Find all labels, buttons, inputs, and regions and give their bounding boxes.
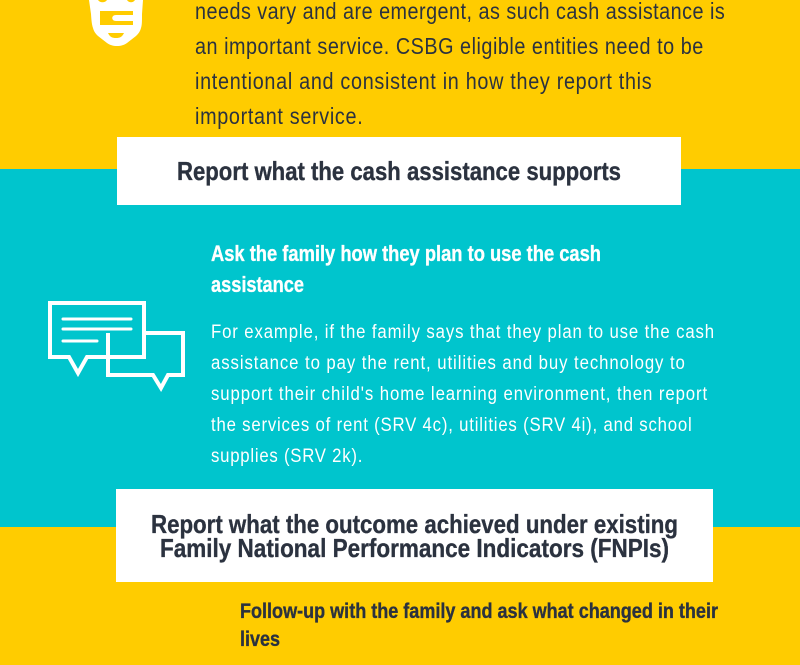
panel: yellow top background bbox=[0, 0, 800, 169]
body text: rent and utilities example: supplies (SRV 2k). bbox=[211, 445, 362, 466]
text block: intro paragraph: an important service. CSBG eligible entities need to be bbox=[195, 34, 703, 59]
heading: report what the cash assistance supports bbox=[117, 137, 681, 205]
subheading: ask the family: assistance bbox=[211, 272, 304, 297]
subheading: follow-up with the family bbox=[240, 600, 718, 651]
body text: rent and utilities example bbox=[211, 321, 714, 466]
text block: intro paragraph: intentional and consistent in how they report this bbox=[195, 69, 652, 94]
heading: report what the cash assistance supports: Report what the cash assistance supports bbox=[177, 156, 621, 186]
heading: report the outcome achieved: Report what the outcome achieved under existing bbox=[151, 509, 678, 539]
subheading: ask the family: Ask the family how they plan to use the cash bbox=[211, 241, 601, 266]
subheading: follow-up with the family: Follow-up with the family and ask what changed in their bbox=[240, 600, 718, 623]
text block: intro paragraph bbox=[195, 0, 725, 129]
text block: intro paragraph: important service. bbox=[195, 104, 363, 129]
body text: rent and utilities example: assistance to pay the rent, utilities and buy technology to bbox=[211, 352, 685, 373]
body text: rent and utilities example: support their child's home learning environment, then report bbox=[211, 383, 707, 404]
panel: teal middle background bbox=[0, 169, 800, 527]
icon: speech bubbles bbox=[50, 303, 183, 388]
panel: yellow bottom background bbox=[0, 527, 800, 665]
text block: ask the family bbox=[211, 241, 714, 466]
icon: cash shield bbox=[89, 0, 143, 46]
heading: report the outcome achieved bbox=[116, 489, 713, 582]
subheading: follow-up with the family: lives bbox=[240, 628, 280, 651]
subheading: ask the family bbox=[211, 241, 601, 297]
heading: report the outcome achieved: Family National Performance Indicators (FNPIs) bbox=[160, 533, 669, 563]
body text: rent and utilities example: the services of rent (SRV 4c), utilities (SRV 4i), and school bbox=[211, 414, 692, 435]
body text: rent and utilities example: For example, if the family says that they plan to use the cash bbox=[211, 321, 714, 342]
